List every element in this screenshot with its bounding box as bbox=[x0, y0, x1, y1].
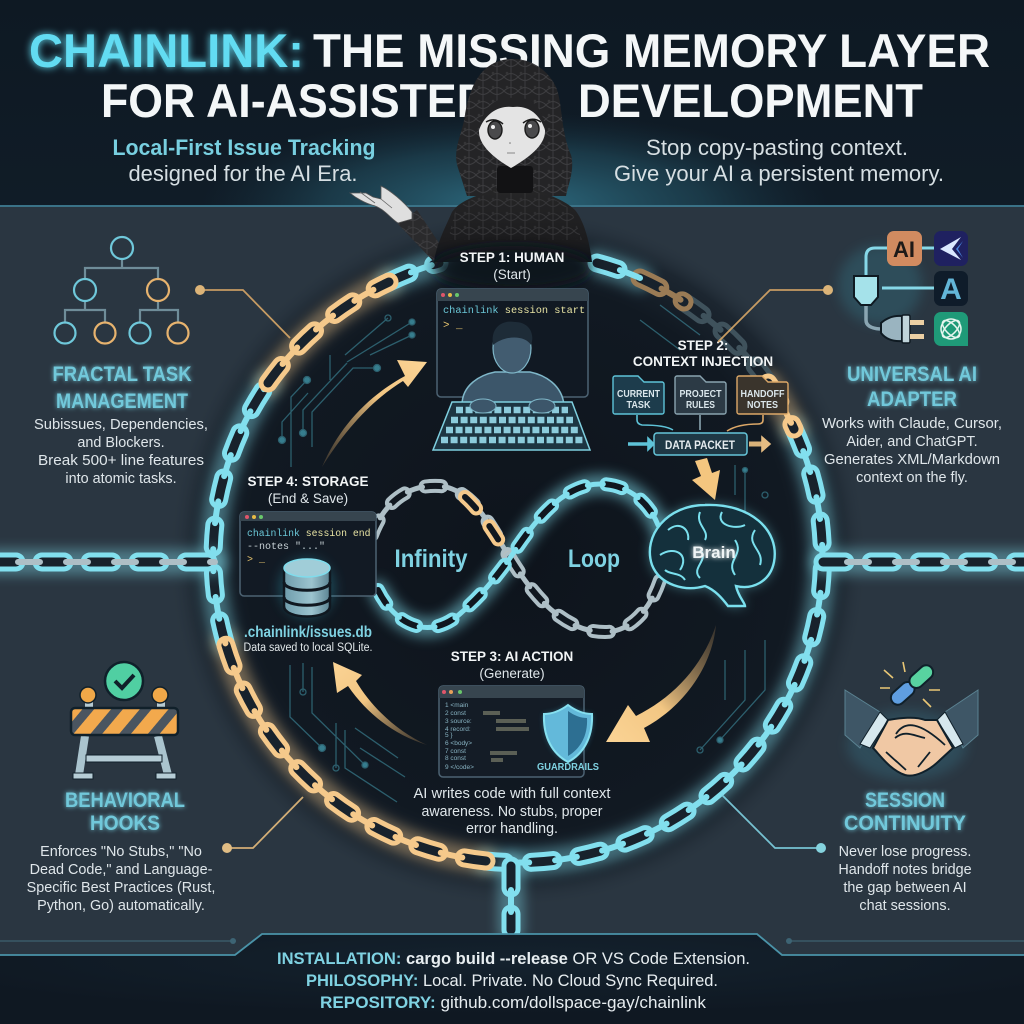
step 2: STEP 2: bbox=[678, 338, 728, 353]
brain bbox=[650, 505, 775, 606]
text: fractal description: Break 500+ line features bbox=[38, 453, 204, 469]
terminal: session end: > _ bbox=[247, 555, 266, 566]
folder: current task: TASK bbox=[626, 399, 651, 411]
title: DEVELOPMENT bbox=[578, 74, 923, 127]
terminal: code bbox=[439, 686, 584, 777]
icon: task tree bbox=[54, 237, 188, 344]
fade behind step 1 label bbox=[432, 246, 592, 290]
circuit decorations bbox=[278, 305, 768, 802]
folder: handoff notes: NOTES bbox=[747, 399, 778, 411]
heading: fractal task management: FRACTAL TASK bbox=[52, 363, 192, 386]
text: continuity description: the gap between AI bbox=[843, 880, 967, 896]
arrow: storage to human bbox=[322, 360, 427, 467]
title: THE MISSING MEMORY LAYER bbox=[313, 24, 990, 77]
step 3 description: error handling. bbox=[466, 821, 558, 837]
step 1: (Start) bbox=[493, 267, 531, 282]
icon: adapter and AI tools: AI bbox=[893, 237, 915, 262]
text: adapter description: Aider, and ChatGPT. bbox=[846, 434, 978, 450]
terminal: code: 6 <body> bbox=[445, 740, 472, 747]
panel: session continuity bbox=[838, 662, 978, 914]
character figure bbox=[350, 59, 592, 264]
title: CHAINLINK: bbox=[29, 24, 304, 77]
terminal: code: 8 const bbox=[445, 755, 466, 762]
terminal: session end: chainlink session end bbox=[247, 528, 371, 539]
connectors to side panels bbox=[195, 285, 833, 853]
terminal: session end bbox=[240, 512, 376, 596]
footer text: REPOSITORY: github.com/dollspace-gay/chainlink bbox=[320, 994, 707, 1012]
heading: behavioral hooks: HOOKS bbox=[90, 812, 160, 835]
folder: current task: CURRENT bbox=[617, 388, 660, 400]
figure: torso bbox=[434, 188, 592, 262]
terminal: code: 2 const bbox=[445, 710, 466, 717]
step 1 bbox=[433, 250, 590, 450]
text: fractal description: into atomic tasks. bbox=[65, 471, 177, 487]
step 4 bbox=[240, 474, 376, 654]
data packet: DATA PACKET bbox=[665, 438, 736, 452]
title: FOR AI-ASSISTED bbox=[101, 74, 489, 127]
figure: hood back bbox=[456, 59, 572, 196]
text: continuity description bbox=[838, 844, 972, 914]
terminal: code: 3 source: bbox=[445, 718, 472, 725]
icon: database bbox=[279, 558, 335, 618]
brain: Brain bbox=[692, 543, 736, 562]
icon: handshake with link bbox=[845, 662, 978, 780]
guardrails label: GUARDRAILS bbox=[537, 762, 599, 773]
text: hooks description: Python, Go) automatically. bbox=[37, 898, 205, 914]
heading: session continuity: CONTINUITY bbox=[844, 812, 966, 835]
terminal: code: 7 const bbox=[445, 748, 466, 755]
heading: behavioral hooks: BEHAVIORAL bbox=[65, 789, 185, 812]
footer band bbox=[0, 934, 1024, 1024]
icon: adapter and AI tools bbox=[838, 231, 968, 346]
step 3 description: awareness. No stubs, proper bbox=[422, 804, 603, 820]
text: hooks description bbox=[27, 844, 215, 914]
infinity loop chain bbox=[372, 484, 660, 632]
header band bbox=[0, 0, 1024, 207]
folder: current task bbox=[613, 376, 664, 414]
step 3: (Generate) bbox=[479, 666, 545, 681]
terminal: code: 9 </code> bbox=[445, 764, 474, 771]
step 2: CONTEXT INJECTION bbox=[633, 354, 773, 369]
step 2 bbox=[613, 338, 788, 455]
folder: handoff notes: HANDOFF bbox=[740, 388, 785, 400]
terminal: session start: > _ bbox=[443, 320, 463, 332]
heading: session continuity bbox=[844, 789, 966, 835]
arrows into data packet bbox=[628, 415, 770, 451]
step 3: STEP 3: AI ACTION bbox=[451, 649, 573, 664]
terminal: code: 5 } bbox=[445, 732, 453, 739]
folder: handoff notes bbox=[737, 376, 788, 414]
heading: behavioral hooks bbox=[65, 789, 185, 835]
subtitle left bbox=[112, 135, 376, 186]
arrow: brain to AI action bbox=[606, 625, 716, 742]
heading: universal AI adapter: ADAPTER bbox=[867, 388, 957, 411]
text: adapter description: Generates XML/Markdown bbox=[824, 452, 1000, 468]
subtitle right: Stop copy-pasting context. bbox=[646, 135, 908, 160]
text: adapter description bbox=[822, 416, 1002, 486]
terminal: code: 1 <main bbox=[445, 702, 469, 709]
folder: project rules: RULES bbox=[686, 399, 715, 411]
dark central disc bbox=[168, 208, 868, 908]
heading: session continuity: SESSION bbox=[865, 789, 945, 812]
text: hooks description: Specific Best Practices (Rust, bbox=[27, 880, 215, 896]
heading: fractal task management bbox=[52, 363, 192, 413]
infinity label: Infinity bbox=[394, 545, 468, 573]
text: hooks description: Enforces "No Stubs," "No bbox=[40, 844, 202, 860]
data packet bbox=[654, 433, 747, 455]
step 1: STEP 1: HUMAN bbox=[460, 250, 564, 265]
icon: barrier with check bbox=[71, 662, 178, 779]
subtitle right: Give your AI a persistent memory. bbox=[614, 161, 944, 186]
side and bottom chain links bbox=[0, 562, 1024, 930]
step 3 bbox=[414, 649, 610, 837]
folder: project rules: PROJECT bbox=[680, 388, 722, 400]
terminal: code: 4 record: bbox=[445, 726, 471, 733]
step 3 description: AI writes code with full context bbox=[414, 786, 610, 802]
panel: universal AI adapter bbox=[822, 231, 1002, 486]
figure: torso lace bbox=[448, 190, 582, 240]
text: adapter description: Works with Claude, Cursor, bbox=[822, 416, 1002, 432]
panel: behavioral hooks bbox=[27, 662, 215, 914]
icon: adapter and AI tools: A bbox=[940, 273, 962, 306]
footer text bbox=[277, 950, 750, 1012]
text: fractal description: Subissues, Dependencies, bbox=[34, 417, 208, 433]
text: adapter description: context on the fly. bbox=[856, 470, 968, 486]
loop label: Loop bbox=[568, 545, 620, 573]
figure: face bbox=[479, 102, 545, 168]
text: continuity description: Never lose progress. bbox=[839, 844, 971, 860]
arrow: data to brain bbox=[692, 458, 720, 500]
terminal: session start: chainlink session start bbox=[443, 305, 585, 317]
database path label: .chainlink/issues.db bbox=[244, 624, 372, 641]
title bbox=[29, 24, 990, 127]
database note: Data saved to local SQLite. bbox=[244, 642, 372, 654]
main chain ring bbox=[213, 263, 822, 863]
step 4: STEP 4: STORAGE bbox=[247, 474, 369, 489]
icon: shield bbox=[544, 705, 592, 762]
step 4: (End & Save) bbox=[268, 491, 348, 506]
step 3 description bbox=[414, 786, 610, 837]
text: fractal description bbox=[34, 417, 208, 487]
footer text: INSTALLATION: cargo build --release OR VS Code Extension. bbox=[277, 950, 750, 968]
figure: hood lace bbox=[456, 59, 572, 196]
terminal: session start bbox=[437, 289, 588, 397]
text: continuity description: chat sessions. bbox=[859, 898, 951, 914]
figure: sleeve and hand bbox=[350, 186, 445, 264]
icon: developer at keyboard bbox=[433, 322, 590, 450]
subtitle left: designed for the AI Era. bbox=[128, 161, 358, 186]
text: continuity description: Handoff notes bridge bbox=[838, 862, 972, 878]
figure: neck bbox=[497, 166, 533, 193]
heading: fractal task management: MANAGEMENT bbox=[56, 390, 188, 413]
text: hooks description: Dead Code," and Language- bbox=[30, 862, 213, 878]
text: fractal description: and Blockers. bbox=[77, 435, 165, 451]
arrow: action to storage bbox=[333, 662, 427, 745]
figure: hair fringe bbox=[479, 98, 545, 130]
subtitle right bbox=[614, 135, 944, 186]
footer text: PHILOSOPHY: Local. Private. No Cloud Sync Required. bbox=[306, 972, 718, 990]
figure: eyes bbox=[486, 119, 541, 153]
terminal: session end: --notes "..." bbox=[247, 541, 325, 553]
heading: universal AI adapter: UNIVERSAL AI bbox=[847, 363, 977, 386]
folder: project rules bbox=[675, 376, 726, 414]
heading: universal AI adapter bbox=[847, 363, 977, 411]
subtitle left: Local-First Issue Tracking bbox=[112, 135, 376, 160]
panel: fractal task management bbox=[34, 237, 208, 487]
